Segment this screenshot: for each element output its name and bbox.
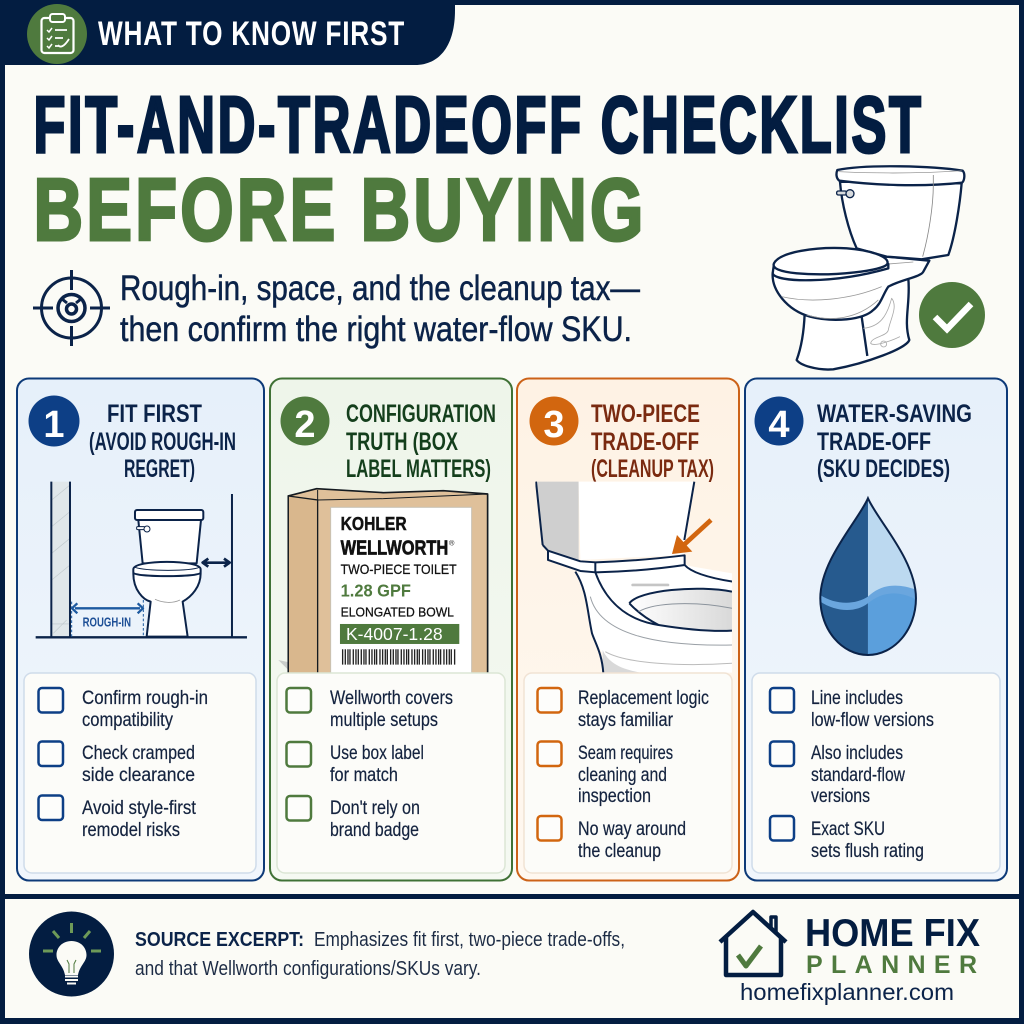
icon: clipboard checklist (27, 4, 87, 64)
checklist 3: Replacement logic (578, 688, 709, 709)
icon: water drop (819, 497, 918, 657)
illustration: product box with label: K-4007-1.28 (346, 624, 443, 644)
source excerpt text: SOURCE EXCERPT: (135, 929, 304, 951)
checklist 2: Wellworth covers (330, 688, 453, 709)
heading 3: (CLEANUP TAX) (591, 455, 714, 483)
checklist 4: Line includes (811, 688, 903, 709)
checklist 4 (752, 673, 1000, 873)
source excerpt text: and that Wellworth configurations/SKUs vary. (135, 958, 481, 980)
checklist 3: the cleanup (578, 841, 661, 862)
checklist 1: remodel risks (82, 820, 180, 841)
panel: fit first (17, 378, 264, 880)
source excerpt text: Emphasizes fit first, two-piece trade-offs, (314, 929, 625, 951)
badge 1 (28, 396, 80, 446)
badge 3 (530, 396, 578, 446)
heading 2: CONFIGURATION (346, 400, 496, 428)
heading 1: FIT FIRST (107, 400, 202, 428)
illustration: product box with label: WELLWORTH (341, 536, 448, 559)
checklist 1: Avoid style-first (82, 798, 197, 819)
illustration: rough-in diagram: ROUGH-IN (83, 616, 131, 630)
heading 4: TRADE-OFF (817, 428, 931, 456)
checklist 1: Confirm rough-in (82, 688, 208, 709)
banner label: WHAT TO KNOW FIRST (98, 15, 405, 53)
header banner (0, 0, 455, 65)
illustration: tank-bowl seam close-up (536, 482, 733, 673)
illustration: product box with label: KOHLER (341, 513, 407, 534)
checklist 3: inspection (578, 786, 651, 807)
badge 4: 4 (768, 404, 790, 446)
panel: configuration truth (270, 378, 512, 880)
heading 1: (AVOID ROUGH-IN (89, 428, 236, 456)
checklist 2: brand badge (330, 820, 419, 841)
checklist 1: compatibility (82, 710, 173, 731)
checklist 4: sets flush rating (811, 841, 924, 862)
heading 3: TWO-PIECE (591, 400, 700, 428)
title (34, 80, 924, 259)
logo: Home Fix Planner: HOME FIX (805, 912, 980, 955)
heading 4: WATER-SAVING (817, 400, 972, 428)
checklist 2 (277, 673, 505, 873)
logo: Home Fix Planner (720, 912, 980, 1005)
checklist 4: Also includes (811, 743, 903, 764)
footer divider (0, 894, 1024, 899)
subtitle (120, 269, 640, 349)
checklist 1 (24, 673, 256, 873)
badge 1: 1 (43, 404, 65, 446)
panel: two-piece trade-off (517, 378, 739, 880)
checklist 3: Seam requires (578, 743, 673, 764)
illustration: product box with label (278, 489, 488, 675)
heading 2: LABEL MATTERS) (346, 455, 491, 483)
checklist 2: multiple setups (330, 710, 438, 731)
checklist 4: Exact SKU (811, 819, 885, 840)
checklist 1: side clearance (82, 765, 195, 786)
subtitle: Rough-in, space, and the cleanup tax— (120, 269, 640, 308)
heading 1: REGRET) (124, 455, 195, 483)
badge 3: 3 (543, 404, 565, 446)
checklist 4: standard-flow (811, 765, 905, 786)
illustration: two-piece toilet (773, 166, 964, 370)
title: BEFORE BUYING (34, 160, 646, 259)
badge 2: 2 (294, 404, 316, 446)
checklist 4: versions (811, 786, 870, 807)
checklist 3: No way around (578, 819, 686, 840)
heading 4: (SKU DECIDES) (817, 455, 950, 483)
illustration: product box with label: ® (449, 539, 455, 548)
illustration: product box with label: TWO-PIECE TOILET (341, 561, 457, 577)
checklist 2: Use box label (330, 743, 424, 764)
icon: house with check (720, 912, 786, 975)
source excerpt text (135, 929, 625, 980)
checklist 2: for match (330, 765, 398, 786)
icon: target (33, 270, 110, 346)
heading 4 (817, 400, 972, 483)
subtitle: then confirm the right water-flow SKU. (120, 310, 632, 349)
illustration: product box with label: ELONGATED BOWL (341, 605, 454, 620)
checklist 3: cleaning and (578, 765, 667, 786)
illustration: rough-in diagram (36, 482, 247, 637)
heading 3 (591, 400, 714, 483)
badge 2 (280, 396, 330, 446)
checklist 3: stays familiar (578, 710, 674, 731)
icon: light bulb (29, 912, 114, 996)
checklist 1: Check cramped (82, 743, 195, 764)
heading 2: TRUTH (BOX (346, 428, 458, 456)
checklist 4: low-flow versions (811, 710, 934, 731)
checklist 2: Don't rely on (330, 798, 420, 819)
illustration: product box with label: 1.28 GPF (341, 581, 411, 601)
heading 2 (346, 400, 496, 483)
badge 4 (754, 396, 804, 446)
heading 1 (89, 400, 236, 483)
icon: green check badge (919, 282, 985, 348)
logo: Home Fix Planner: PLANNER (806, 951, 977, 979)
panel: water-saving trade-off (745, 378, 1007, 880)
heading 3: TRADE-OFF (591, 428, 699, 456)
logo: Home Fix Planner: homefixplanner.com (740, 979, 954, 1005)
checklist 3 (524, 673, 732, 873)
